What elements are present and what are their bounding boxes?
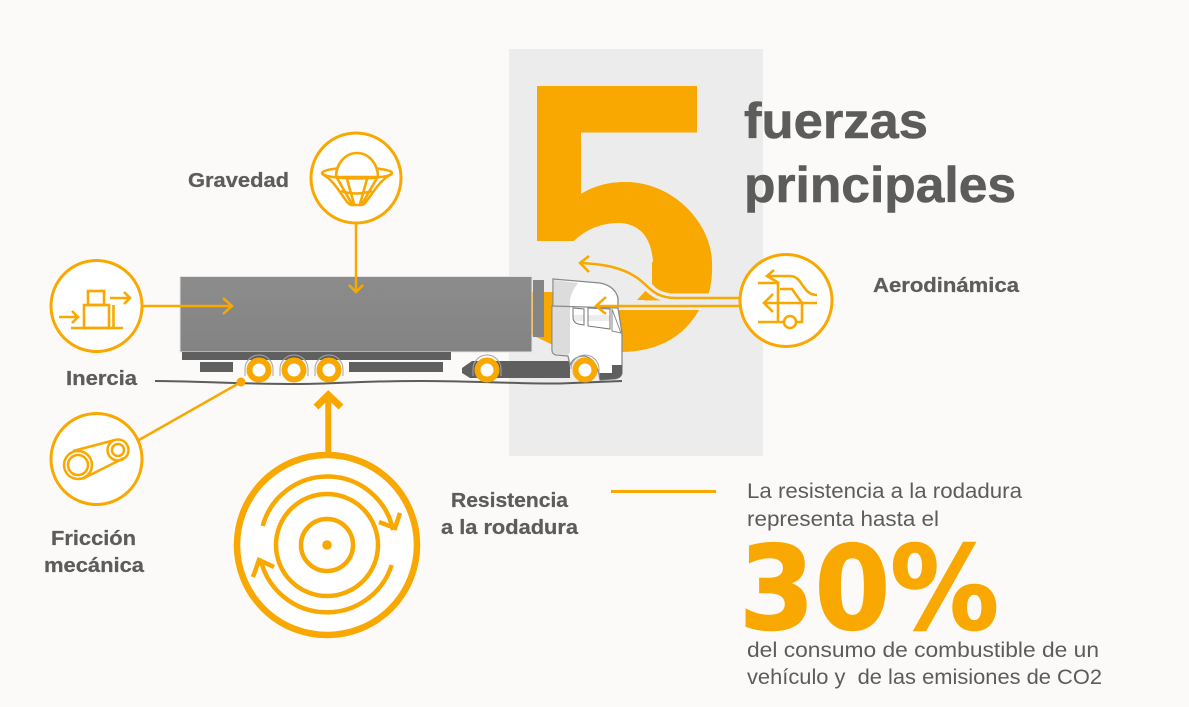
text: del consumo de combustible bbox=[747, 639, 1102, 689]
text: del consumo de combustible: del consumo de combustible de un bbox=[747, 639, 1099, 662]
tractor chassis bbox=[462, 361, 570, 378]
text: La resistencia a la rodadura bbox=[747, 480, 1022, 531]
label: Fricción mecánica: Fricción bbox=[51, 528, 136, 550]
road line bbox=[155, 381, 622, 384]
label: Aerodinámica: Aerodinámica bbox=[873, 275, 1020, 297]
heading: fuerzas principales: fuerzas bbox=[744, 93, 928, 149]
label: Resistencia a la rodadura: a la rodadura bbox=[441, 517, 579, 539]
heading: fuerzas principales: principales bbox=[744, 157, 1016, 213]
icon: friccion mecanica bbox=[51, 414, 142, 504]
arrow: inercia to truck bbox=[142, 298, 232, 314]
label: Resistencia a la rodadura: Resistencia bbox=[451, 490, 569, 512]
label: Fricción mecánica bbox=[44, 528, 145, 577]
big number 5: 5 bbox=[523, 15, 720, 423]
label: Fricción mecánica: mecánica bbox=[44, 555, 145, 577]
text: La resistencia a la rodadura: La resistencia a la rodadura bbox=[747, 480, 1022, 503]
text: La resistencia a la rodadura: representa hasta el bbox=[747, 508, 939, 531]
arrows: aerodinamica flows bbox=[580, 256, 740, 314]
icon: aerodinamica bbox=[740, 254, 832, 346]
big number 30%: 30% bbox=[739, 522, 999, 657]
arrow: rolling resistance up bbox=[316, 395, 341, 455]
arrow: gravedad to truck bbox=[349, 223, 363, 292]
air-flow halo across the 5 bbox=[580, 263, 745, 305]
truck bbox=[155, 276, 622, 384]
text: del consumo de combustible: vehículo y de las emisiones de CO2 bbox=[747, 666, 1102, 689]
label: Gravedad: Gravedad bbox=[188, 170, 289, 192]
trailer body bbox=[180, 276, 532, 352]
wheel arches bbox=[245, 355, 599, 376]
heading: fuerzas principales bbox=[744, 93, 1016, 213]
label: Inercia: Inercia bbox=[66, 368, 138, 390]
cab bbox=[552, 279, 622, 380]
label: Resistencia a la rodadura bbox=[441, 490, 579, 539]
icon: inercia bbox=[51, 260, 142, 352]
connector: friccion to road bbox=[139, 378, 246, 440]
trailer chassis bbox=[182, 352, 451, 360]
icon: gravedad bbox=[311, 133, 401, 223]
leader line bbox=[611, 490, 716, 493]
icon: rolling resistance wheel bbox=[237, 455, 417, 635]
gap panel between trailer and cab bbox=[533, 280, 544, 337]
grey background panel bbox=[509, 49, 763, 456]
truck wheels bbox=[250, 360, 594, 380]
